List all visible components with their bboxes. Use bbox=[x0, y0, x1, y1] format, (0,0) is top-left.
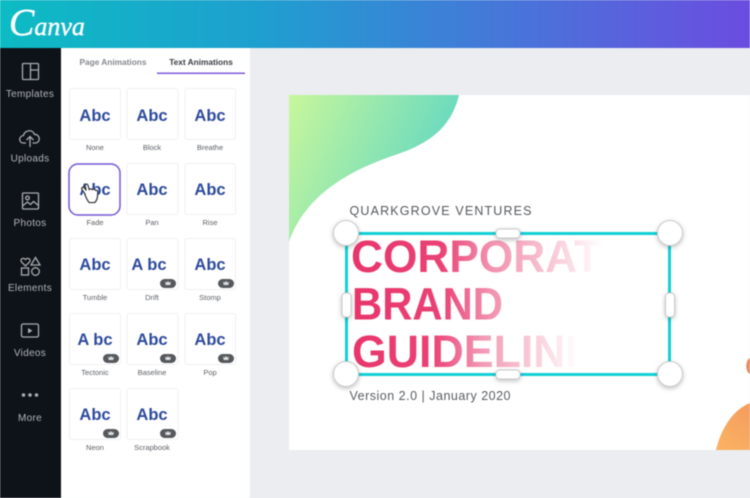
Canva logo: Canva bbox=[9, 2, 85, 44]
company name: QUARKGROVE VENTURES bbox=[350, 204, 532, 218]
nav item: Photos: Photos bbox=[14, 218, 46, 229]
tile: Breathe bbox=[185, 88, 236, 152]
tile: None: None bbox=[86, 143, 104, 152]
tile: Stomp bbox=[185, 238, 236, 302]
tab: Text Animations: Text Animations bbox=[169, 57, 233, 67]
tile: Breathe: Breathe bbox=[197, 143, 223, 152]
tile: Pop: Abc bbox=[194, 331, 226, 349]
nav item: Uploads: Uploads bbox=[11, 154, 49, 164]
tile: Scrapbook: Scrapbook bbox=[134, 443, 170, 452]
tile: Block bbox=[127, 88, 178, 152]
tile: None: Abc bbox=[79, 107, 111, 125]
header bar with Canva logo bbox=[0, 0, 750, 48]
tile: Baseline: Abc bbox=[136, 331, 168, 349]
tile: Rise bbox=[185, 164, 236, 227]
icon: hand cursor bbox=[82, 184, 98, 203]
tile: Rise: Abc bbox=[194, 181, 226, 199]
canvas background bbox=[250, 48, 750, 498]
tile: Pan: Abc bbox=[136, 181, 168, 199]
nav item: Templates: Templates bbox=[6, 89, 54, 100]
nav item: Videos: Videos bbox=[14, 348, 46, 359]
animations panel bbox=[61, 48, 250, 498]
nav item: Elements: Elements bbox=[8, 283, 52, 294]
left navigation sidebar bbox=[0, 48, 61, 498]
headline: GUIDELINI bbox=[352, 326, 578, 377]
tile: Scrapbook: Abc bbox=[136, 406, 168, 424]
tile: Pop bbox=[185, 314, 236, 377]
tile: Tumble: Tumble bbox=[83, 293, 107, 302]
tile: Rise: Rise bbox=[202, 218, 218, 227]
tile: Pan: Pan bbox=[145, 218, 159, 227]
tile: Breathe: Abc bbox=[194, 107, 226, 125]
nav item: Templates bbox=[6, 64, 54, 100]
tile: Drift: Drift bbox=[145, 293, 160, 302]
nav item: More bbox=[18, 393, 42, 424]
tile: Stomp: Stomp bbox=[199, 293, 221, 302]
tile: Neon bbox=[70, 388, 120, 452]
tile: Block: Block bbox=[143, 143, 161, 152]
nav item: Elements bbox=[8, 258, 52, 294]
tab: Text Animations bbox=[157, 57, 245, 74]
headline: CORPORAT bbox=[351, 231, 601, 282]
tile: None bbox=[70, 88, 120, 152]
tile: Block: Abc bbox=[136, 107, 168, 125]
tile: Tectonic: A bc bbox=[77, 331, 113, 349]
tab: Page Animations: Page Animations bbox=[79, 57, 147, 67]
tile: Stomp: Abc bbox=[194, 256, 226, 274]
headline bbox=[351, 231, 601, 377]
tile: Fade selected: Fade bbox=[86, 218, 104, 227]
tile: Pan bbox=[127, 164, 178, 227]
tile: Tectonic bbox=[70, 314, 120, 377]
nav item: More: More bbox=[18, 413, 42, 424]
tile: Tectonic: Tectonic bbox=[81, 368, 109, 377]
tile: Neon: Abc bbox=[79, 406, 111, 424]
tile: Tumble bbox=[70, 238, 120, 302]
tile: Baseline bbox=[127, 314, 178, 377]
nav item: Videos bbox=[14, 324, 46, 359]
decorative green blob bbox=[289, 95, 459, 242]
headline: BRAND bbox=[352, 278, 503, 330]
nav item: Uploads bbox=[11, 131, 49, 164]
tile: Drift: A bc bbox=[131, 256, 167, 274]
version line: Version 2.0 | January 2020 bbox=[350, 389, 511, 403]
tile: Scrapbook bbox=[127, 388, 178, 452]
design page bbox=[289, 95, 750, 450]
selection handles bbox=[334, 220, 682, 386]
tile: Drift bbox=[127, 238, 178, 302]
tile: Pop: Pop bbox=[203, 368, 217, 377]
tile: Neon: Neon bbox=[86, 443, 104, 452]
tile: Fade selected bbox=[69, 164, 120, 227]
nav item: Photos bbox=[14, 193, 46, 229]
tile: Tumble: Abc bbox=[79, 256, 111, 274]
selection frame bbox=[346, 234, 670, 374]
decorative orange blob bbox=[716, 358, 750, 450]
tile: Baseline: Baseline bbox=[138, 368, 166, 377]
tile: Fade selected: Abc bbox=[79, 181, 111, 199]
